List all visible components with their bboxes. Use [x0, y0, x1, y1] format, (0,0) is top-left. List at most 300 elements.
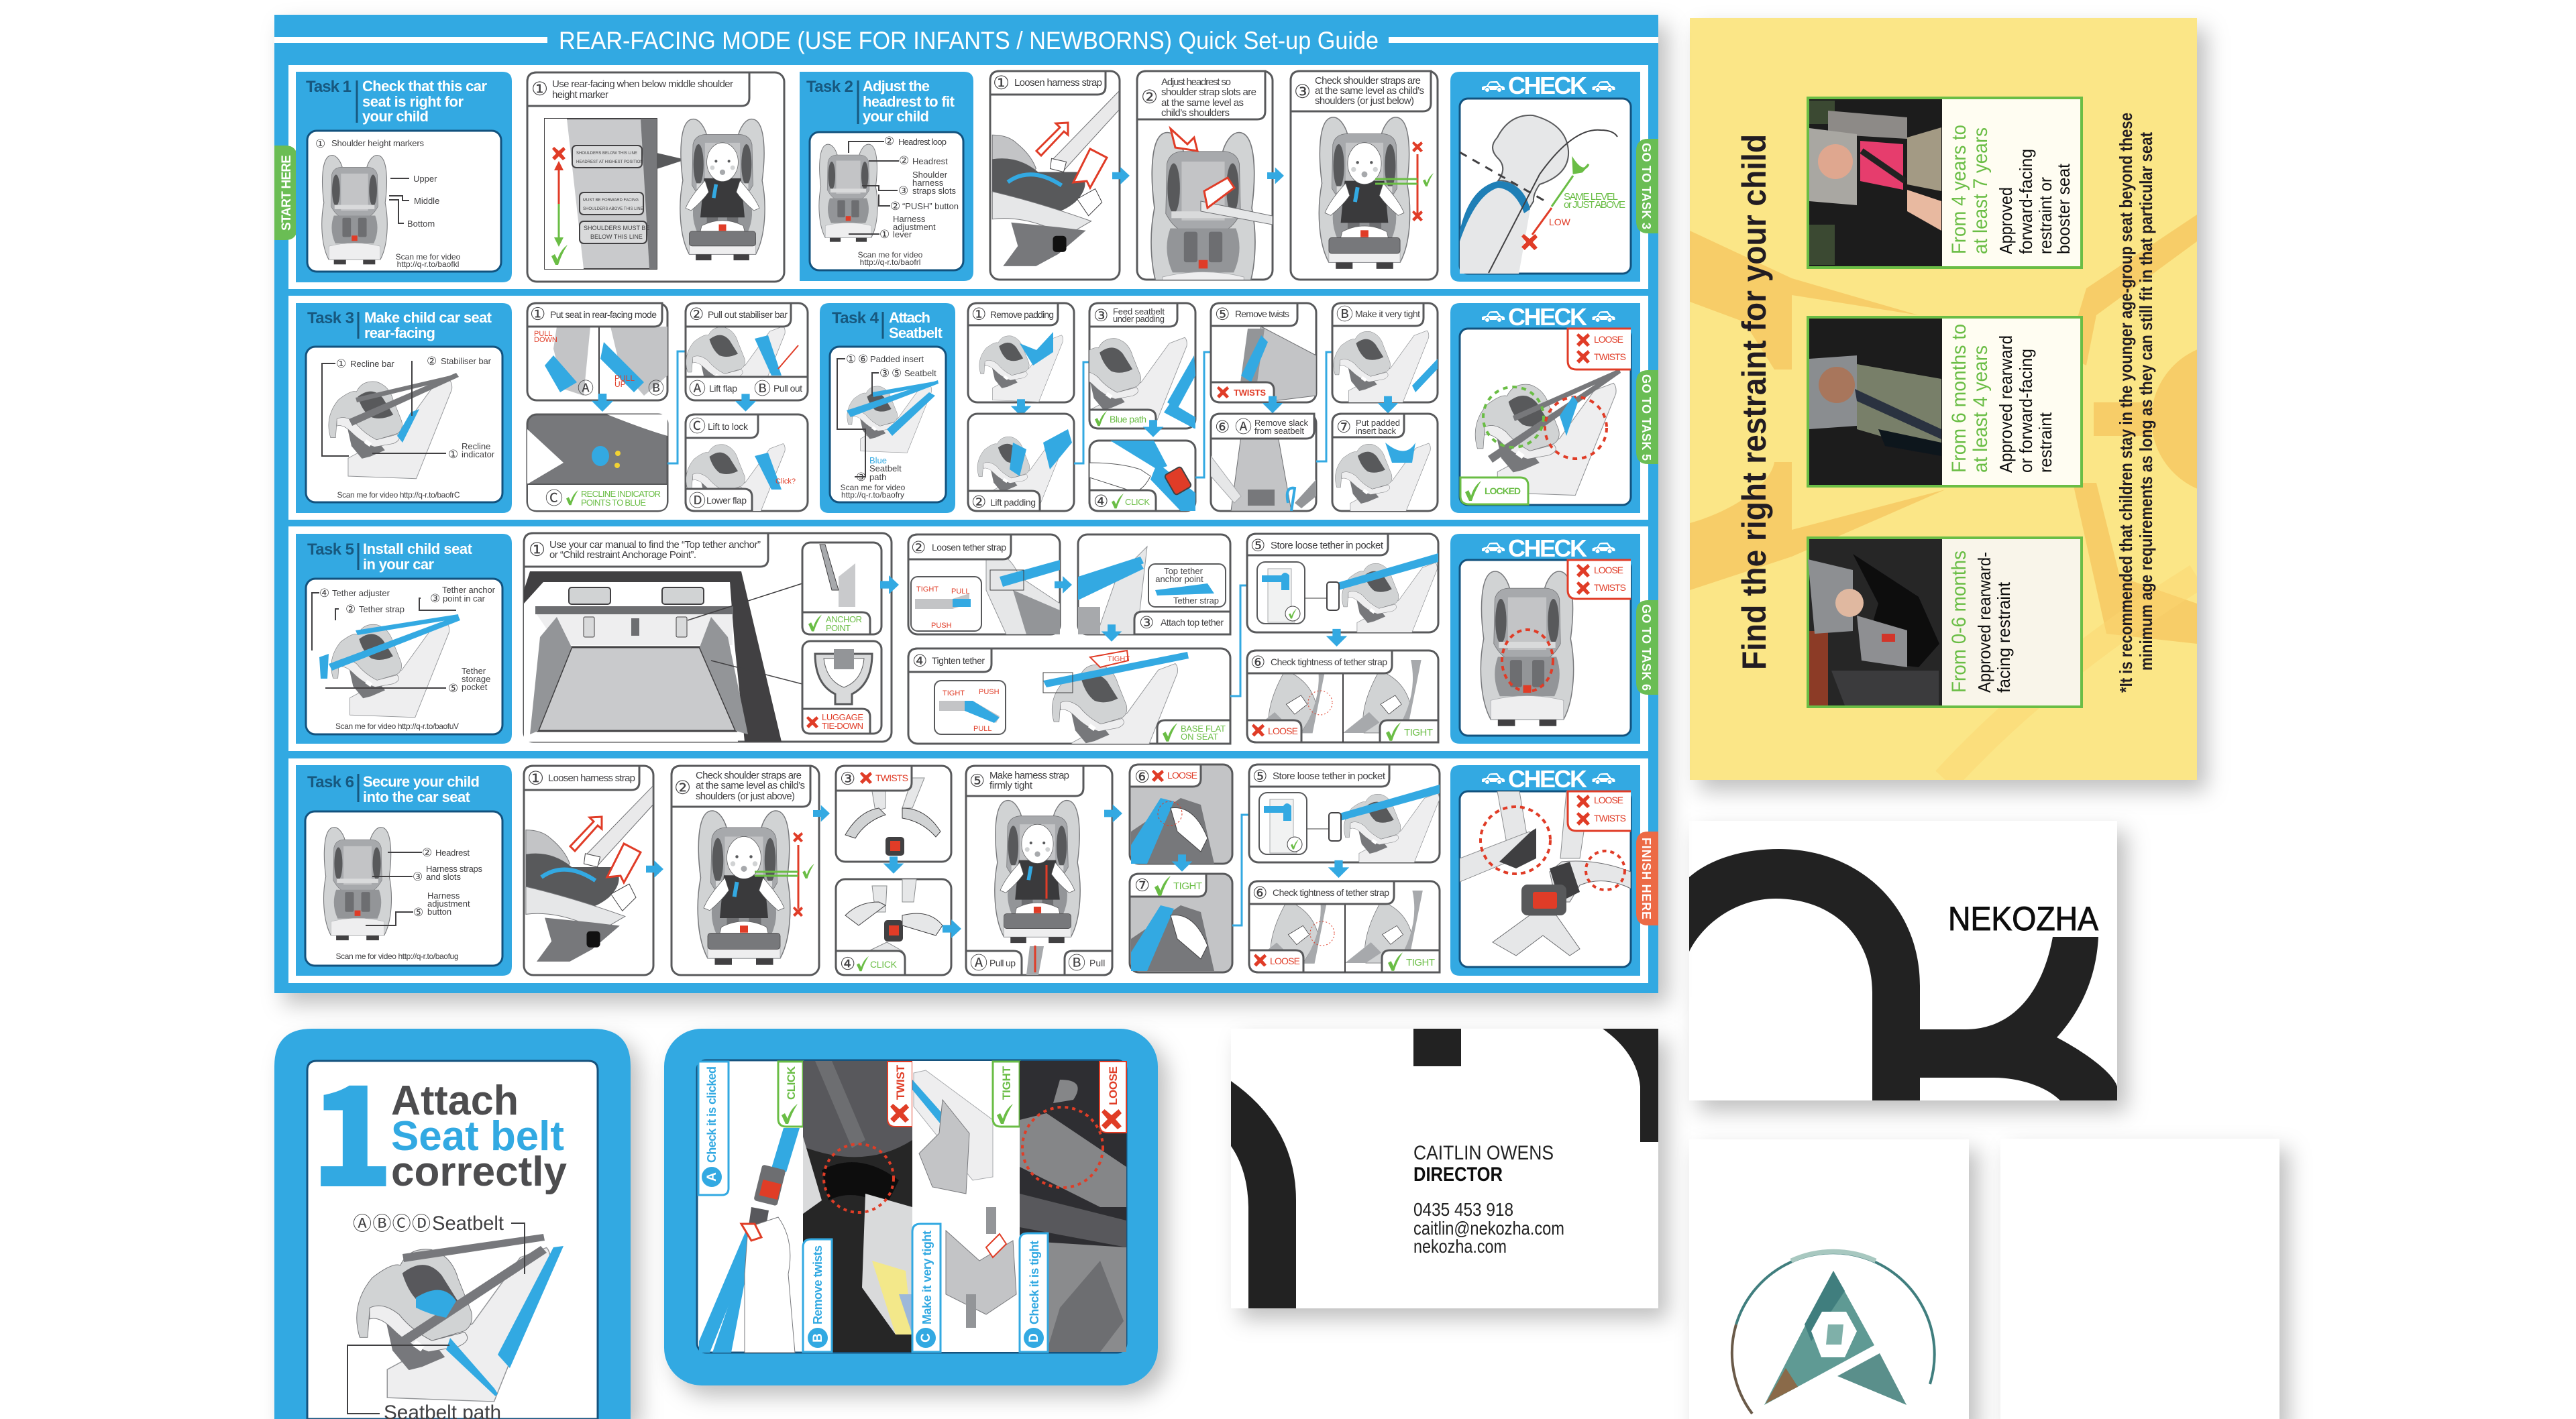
footnote: *It is recommended that children stay in the younger age-group seat beyond these [2116, 113, 2136, 693]
arrow [1328, 860, 1349, 878]
panel: adjust headrest: Adjust headrest so [1161, 76, 1231, 88]
tab: check it is clicked: Check it is clicked [705, 1066, 718, 1163]
panel: task 5: ⑤ [448, 682, 458, 695]
inset: luggage tie-down [802, 641, 881, 734]
inset: tether adjuster: PUSH [931, 622, 952, 630]
illustration: shoulder markers: MUST BE FORWARD FACING [583, 198, 639, 203]
panel: task 6: ③ [413, 870, 423, 883]
panel: check tightness of tether strap [1247, 650, 1438, 742]
text: from 6 months [1948, 324, 2055, 473]
illustration: shoulder markers: BELOW THIS LINE [590, 233, 643, 240]
panel: check shoulder straps row 4 [672, 766, 819, 975]
panel: make harness strap tight: firmly tight [989, 780, 1033, 791]
tab: go to task 5: GO TO TASK 5 [1640, 374, 1653, 461]
panel: attach top tether [1078, 534, 1230, 642]
text: from 6 months: at least 4 years [1970, 345, 1992, 473]
panel: check tightness row 4: TIGHT [1406, 957, 1435, 968]
panel: task 4: Seatbelt [904, 368, 936, 378]
panel: task 2: lever [893, 229, 912, 239]
panel: use rear-facing: height marker [552, 89, 608, 101]
illustration: shoulder markers [545, 119, 765, 269]
panel: task 6: and slots [426, 872, 462, 882]
panel: pull out stabiliser bar: ② [689, 305, 704, 324]
panel: put seat in rear-facing mode: ① [530, 304, 545, 324]
stationery card blank [2000, 1139, 2279, 1419]
panel: task 5: pocket [462, 682, 488, 692]
panel: task 5: Scan me for video http://q-r.to/baofuV [335, 722, 459, 731]
arrow [1172, 854, 1192, 872]
inset: anchor point: POINT [826, 623, 851, 633]
panel: task 6: Task 6 [307, 773, 354, 791]
title [274, 27, 1658, 54]
tab: loose: LOOSE [1107, 1066, 1120, 1105]
panel: check shoulder straps: ③ [1294, 81, 1311, 102]
panel: make harness strap tight [966, 766, 1112, 975]
panel: lift to lock: Lower flap [706, 495, 747, 506]
contact details: DIRECTOR [1413, 1163, 1503, 1186]
panel: check row 2: LOOSE [1594, 334, 1623, 345]
panel: task 4 [820, 303, 955, 513]
tab: start here [274, 146, 297, 240]
panel: task 1: ① [315, 137, 325, 150]
panel: check shoulder straps: shoulders (or just below) [1315, 95, 1414, 107]
contact details: CAITLIN OWENS [1413, 1142, 1554, 1164]
footnote: minimum age requirements as long as they can still fit in that particular seat [2136, 132, 2156, 671]
panel: lift padding: ② [971, 493, 986, 512]
panel: lift to lock: Ⓓ [689, 492, 706, 510]
panel: task 3: ① [448, 448, 458, 461]
panel: check row 4: CHECK [1508, 765, 1587, 793]
panel: adjust headrest: shoulder strap slots are [1161, 87, 1256, 98]
panel: task 6: ⑤ [413, 906, 423, 919]
illustration: buckle and straps [1460, 791, 1631, 956]
tab: remove twists: Remove twists [811, 1245, 824, 1324]
panel: check row 3 [1450, 534, 1640, 744]
panel: put seat in rear-facing mode: Ⓐ [578, 380, 594, 398]
panel: adjust headrest: ② [1141, 87, 1158, 107]
panel: check tightness row 4: Check tightness of tether strap [1273, 887, 1389, 898]
panel: loosen tether strap [908, 534, 1060, 634]
footnote [2116, 113, 2156, 693]
panel: adjust headrest: child’s shoulders [1161, 107, 1230, 119]
panel: tight harness close-up: ⑦ [1134, 875, 1150, 895]
panel: task 3: indicator [462, 449, 495, 459]
inset: top tether anchor point: Tether strap [1173, 595, 1219, 606]
panel: task 2: your child [863, 108, 929, 125]
panel: check shoulder straps row 4: ② [674, 777, 691, 798]
tab: tight: TIGHT [1000, 1066, 1013, 1100]
panel: check shoulder straps [1291, 71, 1438, 280]
heading: Find the right restraint for your child [1735, 134, 1773, 670]
panel: pull out stabiliser bar: Pull out stabiliser bar [708, 309, 788, 320]
tab: go to task 6 [1636, 600, 1658, 695]
strip A: check it is clicked [698, 1062, 803, 1353]
panel: tighten tether: Tighten tether [932, 655, 985, 666]
panel: put seat in rear-facing mode: Ⓑ [648, 380, 664, 398]
panel: task 2: Task 2 [806, 78, 853, 96]
tab: finish here [1636, 832, 1658, 925]
panel: loosen harness strap row 4: Loosen harness strap [548, 773, 635, 784]
panel: task 2: http://q-r.to/baofrl [860, 258, 920, 267]
tab: make it very tight: Make it very tight [920, 1231, 934, 1324]
panel: use rear-facing [527, 72, 784, 282]
panel: adjust headrest [1137, 71, 1273, 306]
text: from 6 months: restraint [2035, 412, 2055, 473]
panel: check tightness of tether strap: ⑥ [1250, 653, 1265, 672]
panel: tighten tether: TIGHT [1108, 655, 1130, 663]
panel: remove padding: ① [971, 305, 986, 324]
panel: task 4: path [869, 472, 886, 482]
panel: click: CLICK [1125, 497, 1150, 507]
label: ABCD seatbelt: ⒶⒷⒸⒹ [353, 1213, 431, 1234]
panel: check row 1: CHECK [1508, 72, 1587, 99]
panel: task 2: “PUSH” button [902, 201, 959, 211]
panel: remove slack [1211, 414, 1316, 511]
illustration: shoulder markers: SHOULDERS BELOW THIS LINE [576, 152, 637, 156]
panel: check shoulder straps: Check shoulder straps are [1315, 75, 1421, 87]
panel: task 3: Stabiliser bar [441, 356, 492, 366]
inset: storage pocket [1259, 793, 1307, 854]
panel: check tightness of tether strap: TIGHT [1404, 727, 1433, 738]
illustration: locked seat [1475, 369, 1621, 496]
panel: top tether anchor in car: ① [529, 539, 545, 560]
panel: store loose tether row 4 [1249, 764, 1440, 869]
inset: tighten adjuster [934, 681, 1006, 734]
arrow [813, 805, 830, 822]
panel: pull out stabiliser bar: Lift flap [709, 383, 737, 394]
panel: check tightness row 4: LOOSE [1270, 956, 1300, 966]
panel: put padded insert back: insert back [1356, 426, 1397, 436]
panel: task 4: ③ [879, 367, 890, 380]
contact details: 0435 453 918 [1413, 1199, 1513, 1220]
title: REAR-FACING MODE (USE FOR INFANTS / NEWBORNS) Quick Set-up Guide [559, 27, 1379, 54]
panel: top tether anchor in car [524, 533, 892, 742]
panel: task 4: Attach [889, 309, 930, 326]
panel: put seat in rear-facing mode [527, 303, 667, 400]
panel: task 4: Padded insert [870, 354, 924, 364]
panel: task 5: Tether [462, 666, 486, 676]
panel: make it very tight: Make it very tight [1355, 308, 1420, 319]
panel: task 2: adjustment [893, 222, 936, 232]
inset: anchor point: ANCHOR [826, 614, 862, 624]
tab: go to task 6: GO TO TASK 6 [1640, 604, 1653, 691]
panel: task 2: ② [884, 135, 894, 148]
panel: put seat in rear-facing mode: DOWN [534, 336, 557, 344]
panel: check row 1 [1450, 72, 1640, 282]
card: 6 months to 4 years [1808, 317, 2082, 486]
card: 4 to 7 years [1808, 98, 2082, 268]
panel: task 5: ④ [319, 587, 329, 600]
photo: baby capsule [1808, 539, 1942, 705]
illustration: shoulder markers: SHOULDERS MUST BE [584, 225, 649, 231]
panel: task 5: Task 5 [307, 541, 354, 559]
panel: task 4: ⑥ [858, 353, 868, 365]
panel: attach top tether: ③ [1139, 614, 1154, 632]
panel: task 2: headrest to fit [863, 93, 955, 110]
arrow [943, 919, 961, 938]
arrow [735, 394, 756, 412]
panel: yellow restraint guide [1690, 18, 2303, 780]
panel: task 2: ② [890, 200, 900, 213]
inset: top tether anchor point: anchor point [1155, 574, 1203, 584]
heading: attach seat belt correctly: Seat belt [391, 1113, 564, 1159]
panel: pull out stabiliser bar: Ⓑ [754, 380, 771, 398]
panel: task 3: Scan me for video http://q-r.to/baofrC [337, 490, 460, 500]
illustration: head and strap level [1460, 114, 1618, 274]
illustration: seat [819, 144, 877, 242]
panel: task 3: Recline [462, 441, 490, 451]
strip C: make it very tight [912, 1061, 1020, 1352]
panel: check row 3: TWISTS [1594, 582, 1626, 593]
panel: make harness strap tight: Ⓐ [970, 953, 987, 973]
panel: pull out stabiliser bar [686, 303, 808, 405]
panel: tighten tether: BASE FLAT [1181, 724, 1226, 734]
panel: check row 2: CHECK [1508, 303, 1587, 331]
stationery card with logo [1689, 1139, 1969, 1419]
arrow [1378, 396, 1398, 413]
panel: task 1: Middle [414, 196, 439, 206]
panel: task 1: Task 1 [306, 78, 352, 96]
panel: task 1: Scan me for video [396, 252, 461, 262]
panel: task 1: your child [362, 108, 429, 125]
inset: tighten adjuster: PUSH [979, 688, 1000, 696]
panel: task 5: Tether anchor [442, 585, 496, 595]
tab: click [778, 1062, 803, 1127]
panel: loose harness close-up [1130, 764, 1232, 864]
tab: check it is clicked [698, 1062, 729, 1195]
panel: check row 1: or JUST ABOVE [1564, 199, 1625, 211]
panel: task 2: ② [899, 154, 909, 167]
tab: check it is tight: D [1027, 1333, 1041, 1343]
panel: task 6: adjustment [427, 899, 470, 909]
inset: luggage tie-down: LUGGAGE [822, 712, 863, 722]
business card front: Nekozha [1689, 821, 2117, 1100]
panel: check shoulder straps: at the same level as child’s [1315, 85, 1424, 97]
panel: loosen harness strap row 4 [524, 766, 653, 975]
big numeral 1: 1 [310, 1025, 394, 1227]
panel: remove slack: Ⓐ [1235, 418, 1252, 437]
illustration: shoulder markers: HEADREST AT HIGHEST POSITION [576, 160, 643, 164]
panel: twists: TWISTS [875, 773, 908, 783]
panel: make harness strap tight: ⑤ [969, 771, 985, 791]
panel: task 1: Bottom [407, 219, 435, 229]
tab: twist [888, 1062, 912, 1127]
panel: task 6: into the car seat [363, 789, 471, 805]
panel: task 5 [296, 534, 512, 744]
panel: task 4: Blue [869, 455, 887, 465]
panel: remove twists: TWISTS [1234, 388, 1266, 398]
panel: put seat in rear-facing mode: PULL [614, 374, 635, 383]
panel: twists [836, 766, 951, 862]
panel: loosen tether strap: ② [911, 538, 926, 557]
panel: task 6: Scan me for video http://q-r.to/baofug [335, 952, 459, 961]
panel: task 4: ① [846, 353, 856, 365]
panel: tight harness close-up [1130, 874, 1232, 972]
panel: task 4: ③ [856, 471, 866, 484]
panel: task 4: ⑤ [892, 367, 902, 380]
panel: task 5: Tether adjuster [332, 588, 390, 598]
panel: store loose tether [1247, 534, 1438, 638]
panel: make harness strap tight: Ⓑ [1068, 953, 1085, 973]
panel: remove padding: Remove padding [990, 309, 1054, 320]
panel: task 1: seat is right for [362, 93, 464, 110]
panel: attach top tether: Attach top tether [1161, 617, 1224, 628]
strip D: loose photo [1020, 1061, 1126, 1352]
panel: check tightness of tether strap: LOOSE [1268, 726, 1298, 736]
business card back: Caitlin Owens [1231, 1029, 1658, 1308]
card: 0-6 months [1808, 538, 2082, 707]
panel: tighten tether [908, 648, 1230, 764]
heading: attach seat belt correctly [391, 1078, 568, 1195]
panel: task 2: Headrest [912, 156, 948, 166]
panel: recline indicator: Ⓒ [545, 488, 563, 508]
inset: luggage tie-down: TIE-DOWN [822, 721, 863, 731]
panel: put seat in rear-facing mode: UP [614, 380, 626, 389]
panel: task 3: Recline bar [350, 359, 394, 369]
panel: twists: ③ [840, 769, 855, 789]
panel: loosen harness strap [990, 71, 1120, 280]
panel: lift to lock: Ⓒ [689, 417, 706, 436]
panel: task 3: Make child car seat [364, 309, 492, 326]
panel: task 2: harness [912, 178, 944, 188]
text: from 0-6 months: From 0-6 months [1948, 551, 1970, 693]
panel: feed seatbelt: under padding [1113, 314, 1165, 324]
tab: loose [1099, 1062, 1126, 1133]
panel: task 4: Task 4 [832, 309, 879, 327]
arrow [1104, 805, 1122, 822]
panel: make harness strap tight: Pull up [989, 958, 1016, 968]
panel: check row 4: TWISTS [1594, 813, 1626, 824]
arrow [592, 394, 613, 412]
inset: tether adjuster [911, 577, 981, 631]
text: from 4 years: booster seat [2053, 163, 2074, 254]
text: from 0-6 months: Approved rearward- [1974, 552, 1994, 693]
panel: click row 4: ④ [840, 954, 855, 974]
panel: store loose tether row 4: Store loose tether in pocket [1273, 771, 1386, 782]
panel: feed seatbelt [1073, 303, 1195, 429]
inset: tighten adjuster: PULL [973, 725, 992, 733]
panel: lift padding: Lift padding [990, 497, 1036, 508]
tab: click: CLICK [785, 1066, 798, 1100]
panel: task 3: Task 3 [307, 309, 354, 327]
arrow [646, 860, 663, 878]
photo: toddler in seat [1809, 319, 1942, 485]
panel: task 5: storage [462, 674, 490, 684]
panel: check tightness of tether strap: Check tightness of tether strap [1271, 657, 1387, 667]
panel: task 6 [296, 765, 512, 976]
panel: recline indicator: RECLINE INDICATOR [581, 489, 661, 499]
arrow [1112, 167, 1130, 184]
panel: task 5: Install child seat [363, 541, 473, 557]
poster: rear-facing quick set-up guide [274, 15, 1658, 993]
tab: check it is tight [1020, 1233, 1048, 1352]
panel: check row 4 [1450, 765, 1640, 976]
text: from 6 months: From 6 months to [1948, 324, 1970, 473]
panel: check shoulder straps row 4: Check shoulder straps are [696, 770, 802, 781]
panel: make harness strap tight: Pull [1089, 958, 1105, 968]
panel: lift to lock [686, 414, 808, 522]
tab: twist: TWIST [894, 1064, 907, 1100]
panel: task 2 [800, 72, 973, 281]
panel: put padded insert back [1332, 414, 1438, 519]
panel: task 3: ② [427, 355, 437, 367]
panel: task 4: Seatbelt [889, 325, 943, 341]
text: from 4 years: at least 7 years [1970, 127, 1992, 254]
arrow [1267, 168, 1284, 184]
panel: task 5: ③ [430, 592, 440, 605]
contact details [1413, 1142, 1564, 1257]
panel: check tightness row 4 [1249, 881, 1440, 972]
panel: task 4: Seatbelt [869, 463, 902, 473]
panel: click [1089, 441, 1195, 511]
panel: task 1: Upper [413, 174, 437, 184]
panel: task 4: Scan me for video [841, 483, 906, 492]
panel: check tightness row 4: ⑥ [1252, 884, 1267, 903]
panel: task 1: http://q-r.to/baofkl [397, 260, 459, 269]
text: from 4 years: From 4 years to [1948, 125, 1970, 254]
heading: attach seat belt correctly: correctly [391, 1149, 568, 1195]
panel: check shoulder straps row 4: shoulders (or just above) [696, 791, 795, 802]
panel: task 3: ① [336, 357, 346, 370]
panel: task 5: Tether strap [359, 604, 405, 614]
illustration: seat [322, 156, 387, 264]
inset: tether adjuster: TIGHT [916, 585, 938, 593]
panel: task 2: Harness [893, 214, 926, 224]
panel: put seat in rear-facing mode: PULL [534, 330, 553, 338]
text: from 6 months: Approved rearward [1996, 335, 2016, 473]
arrow [1011, 399, 1031, 416]
panel: use rear-facing: Use rear-facing when below middle shoulder [552, 78, 733, 90]
tab: go to task 3: GO TO TASK 3 [1640, 143, 1653, 229]
text: from 4 years: Approved [1996, 187, 2016, 254]
panel: task 6: Secure your child [363, 773, 480, 790]
panel: pull out stabiliser bar: Pull out [773, 383, 802, 394]
panel: task 2: Adjust the [863, 78, 930, 95]
panel: lift padding [968, 414, 1074, 512]
panel: task 2: ③ [898, 184, 908, 197]
panel: lift to lock: Lift to lock [708, 421, 749, 432]
panel: make it very tight [1332, 303, 1438, 406]
tab: check it is tight: Check it is tight [1028, 1241, 1041, 1324]
panel: check row 3: LOOSE [1594, 565, 1623, 575]
illustration: shoulder markers: SHOULDERS ABOVE THIS LINE [583, 207, 643, 211]
panel: remove slack: ⑥ [1215, 418, 1230, 437]
panel: loosen harness strap: ① [993, 72, 1010, 93]
arrow [1326, 629, 1347, 646]
tab: remove twists: B [811, 1333, 825, 1343]
panel: make harness strap tight: Make harness strap [989, 770, 1069, 781]
inset: top tether anchor point: Top tether [1164, 566, 1203, 576]
brand mark K [1689, 849, 2117, 1100]
illustration: car boot [524, 571, 801, 742]
panel: task 5: ② [345, 603, 356, 616]
panel: check row 2: LOCKED [1485, 486, 1521, 496]
panel: make it very tight: Ⓑ [1336, 305, 1353, 324]
arrow [1263, 396, 1283, 413]
panel: loosen harness strap: Loosen harness strap [1014, 77, 1102, 89]
panel: recline indicator: POINTS TO BLUE [581, 498, 646, 508]
panel: check row 3: CHECK [1508, 534, 1587, 562]
panel: tighten tether: ④ [912, 652, 927, 671]
panel: feed seatbelt: ③ [1093, 306, 1108, 325]
panel: task 6: ② [422, 846, 432, 859]
panel: check row 2: TWISTS [1594, 351, 1626, 362]
panel: feed seatbelt: Blue path [1110, 414, 1146, 424]
panel: check shoulder straps row 4: at the same level as child’s [696, 780, 805, 791]
panel: feed seatbelt: Feed seatbelt [1113, 306, 1165, 317]
panel: task 1 [296, 72, 512, 282]
strip B: twist photo [803, 1061, 912, 1352]
